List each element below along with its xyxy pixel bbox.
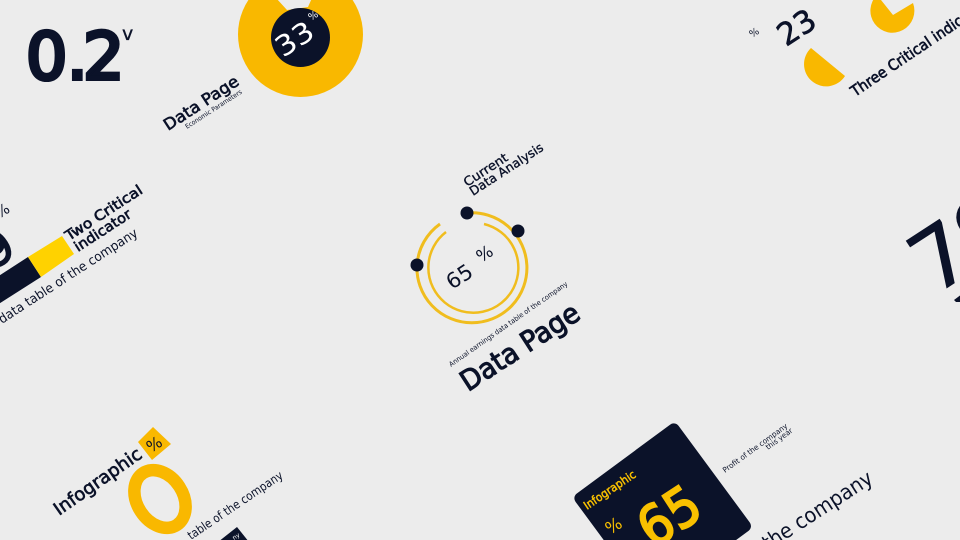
- donut title: Data Page: [160, 72, 242, 134]
- pie chart lower: [804, 48, 845, 86]
- panel: two critical indicator: [0, 182, 146, 327]
- dark label: [218, 527, 249, 540]
- title data page: Data Page: [454, 296, 586, 398]
- gauge percent sign: %: [473, 242, 497, 267]
- donut notch: [276, 0, 312, 10]
- heading two critical: Two Critical: [62, 182, 146, 245]
- panel: infographic ring: [50, 427, 286, 540]
- gauge value: 65: [442, 259, 477, 294]
- panel: central ring gauge: [410, 140, 586, 398]
- heading indicator: indicator: [71, 206, 135, 255]
- caption: table of the company: [185, 468, 286, 540]
- ring marker top: [460, 206, 474, 220]
- heading data analysis: Data Analysis: [466, 140, 546, 199]
- stat value 0.2: 0.2: [26, 20, 124, 95]
- heading current: Current: [460, 150, 511, 190]
- percent badge sign: %: [143, 432, 166, 457]
- caption annual earnings: Annual earnings data table of the company: [448, 280, 569, 369]
- card heading: Infographic: [581, 467, 638, 512]
- ring marker left: [410, 258, 424, 272]
- caption line one: Profit of the company: [721, 421, 790, 475]
- card background: [572, 421, 753, 540]
- panel: infographic card: [574, 423, 751, 540]
- inner ring arc: [428, 224, 518, 313]
- percent sign: %: [748, 26, 762, 41]
- outer ring arc: [417, 213, 527, 323]
- donut percent sign: %: [307, 9, 321, 24]
- caption: data table of the company: [0, 226, 141, 327]
- panel: large value at right edge: [892, 172, 960, 313]
- bar dark segment: [0, 257, 41, 307]
- panel: donut 33 percent: [160, 0, 363, 134]
- panel: voltage stat: [26, 20, 133, 95]
- pie chart upper: [870, 0, 914, 33]
- card percent sign: %: [602, 514, 626, 539]
- fragment below value: [954, 294, 960, 302]
- stat unit v: v: [122, 23, 133, 45]
- donut centre: [271, 8, 330, 67]
- ring: [124, 460, 196, 538]
- panel: pies 23 percent: [748, 0, 960, 101]
- percent badge: [138, 427, 171, 460]
- donut value: 33: [269, 14, 320, 64]
- heading infographic: Infographic: [50, 444, 146, 520]
- bar yellow segment: [28, 236, 74, 277]
- caption line two: this year: [764, 426, 795, 452]
- ring marker right: [512, 224, 524, 238]
- panel: profit caption: [721, 421, 795, 475]
- value 23: 23: [771, 2, 823, 54]
- donut subtitle: Economic Parameters: [184, 88, 244, 131]
- donut ring: [238, 0, 363, 97]
